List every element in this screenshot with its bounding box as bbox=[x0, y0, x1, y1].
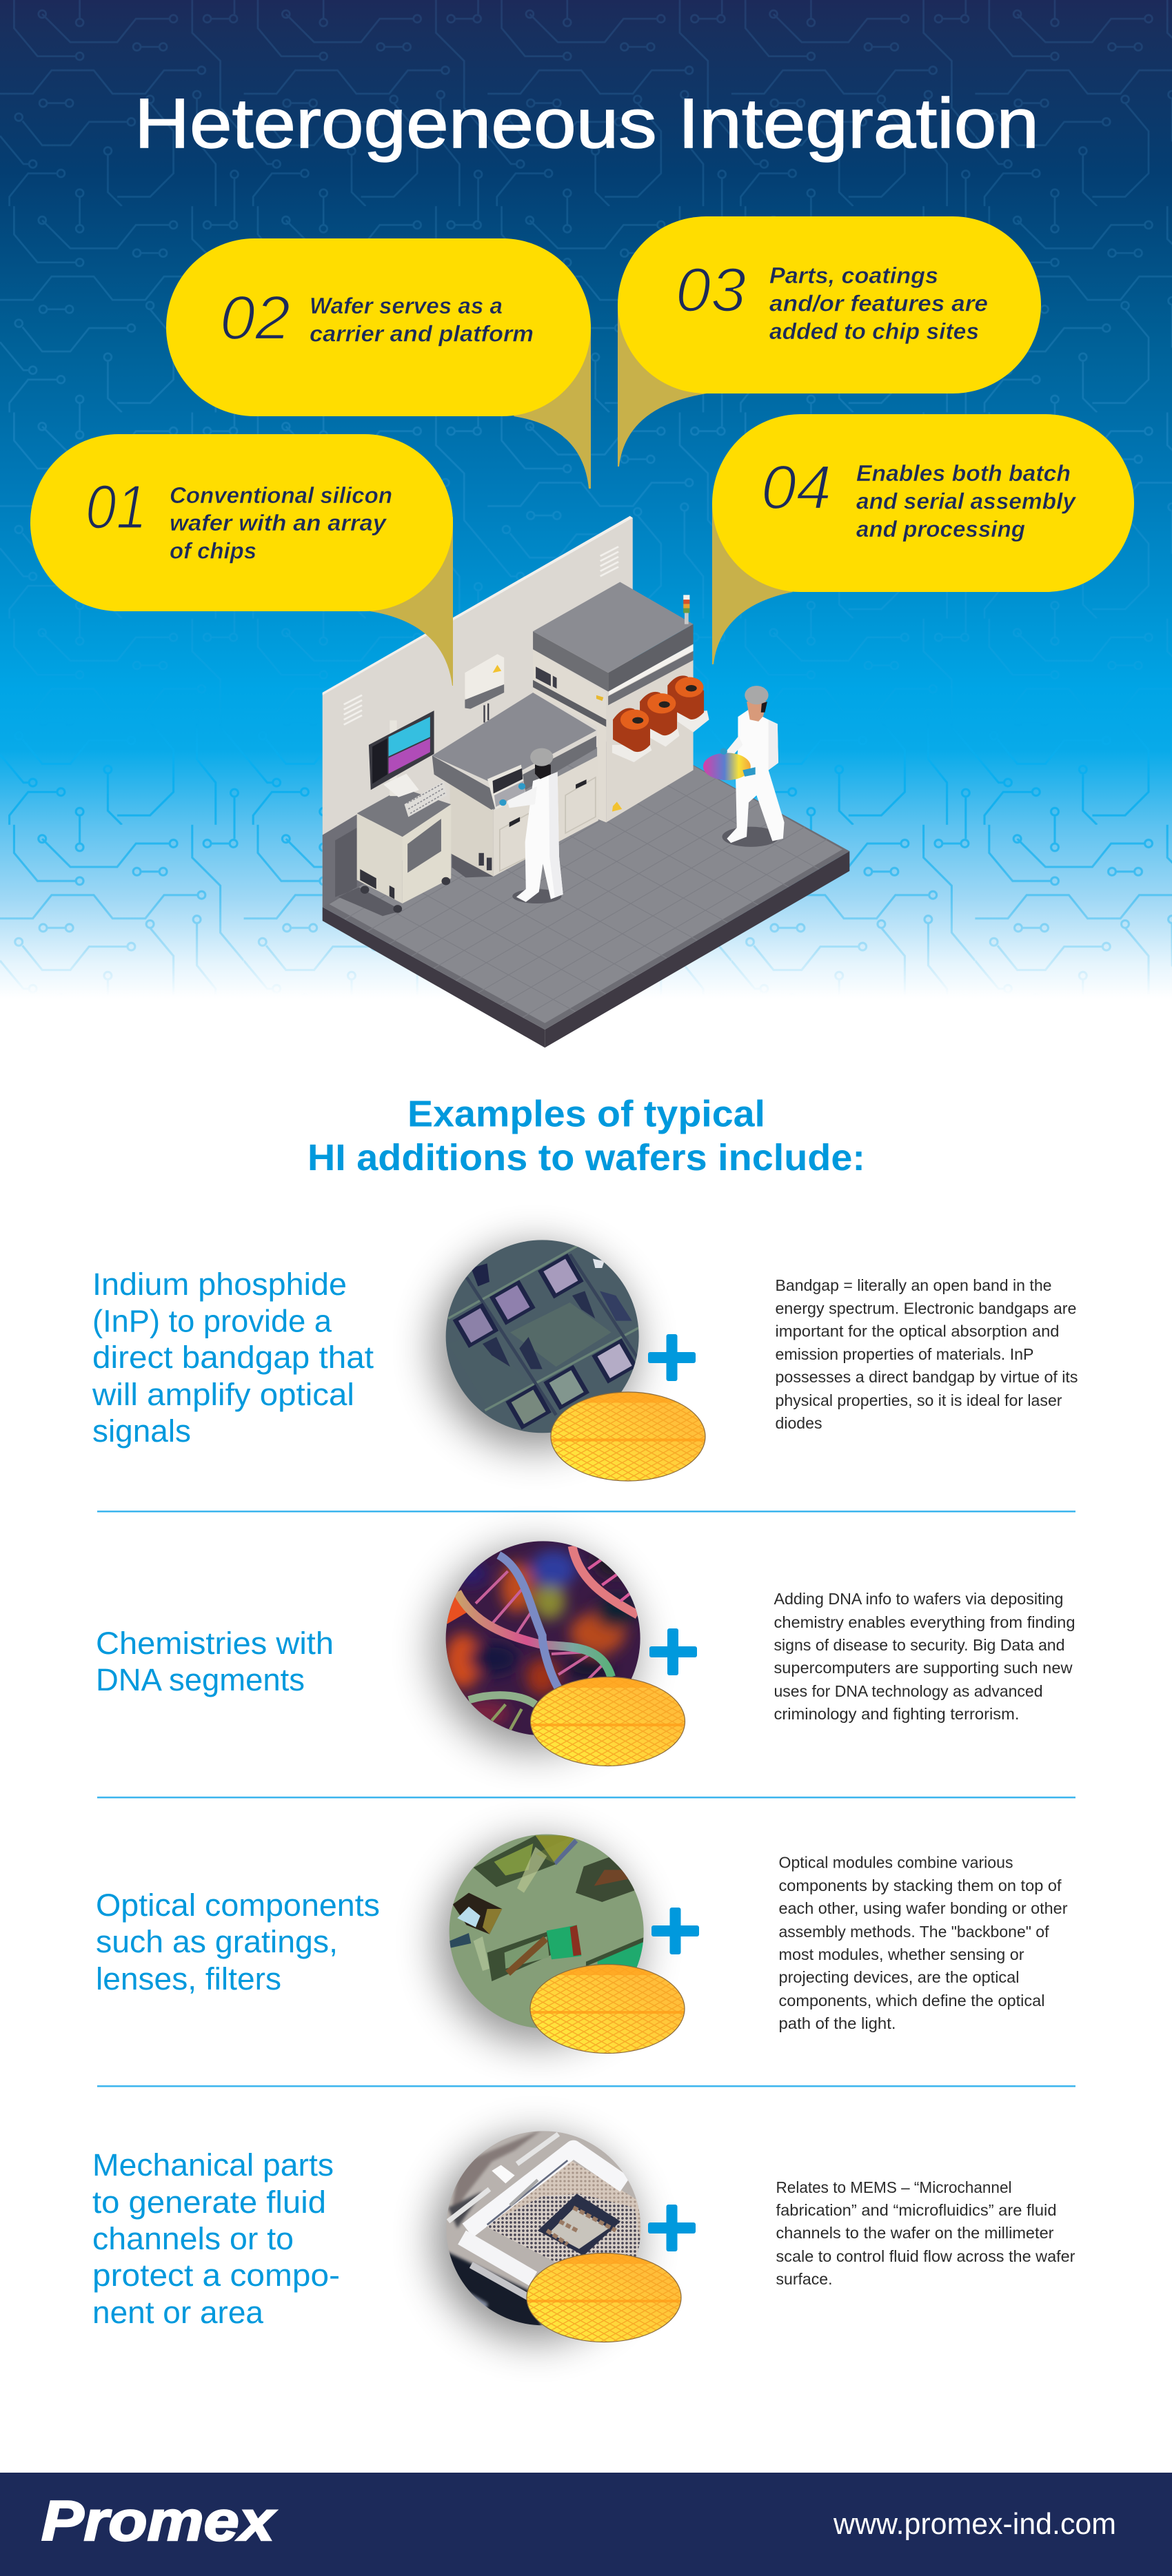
callout 02: Wafer serves as a bbox=[310, 293, 503, 318]
row 2 description bbox=[774, 1590, 1075, 1723]
callout 04: and serial assembly bbox=[856, 488, 1077, 514]
row 1 heading text: Indium phosphide bbox=[92, 1267, 347, 1302]
row 2 description: Adding DNA info to wafers via depositing bbox=[774, 1590, 1063, 1608]
row 2 heading text: DNA segments bbox=[96, 1662, 305, 1697]
shadow bbox=[434, 1247, 636, 1448]
callout 03: 03 bbox=[676, 256, 746, 325]
row 2 description: uses for DNA technology as advanced bbox=[774, 1682, 1042, 1700]
row 1 description: energy spectrum. Electronic bandgaps are bbox=[775, 1299, 1077, 1317]
website url: www.promex-ind.com bbox=[833, 2507, 1116, 2541]
section heading: HI additions to wafers include: bbox=[307, 1137, 865, 1178]
row 2 description: chemistry enables everything from finding bbox=[774, 1613, 1075, 1631]
row 1 description: emission properties of materials. InP bbox=[775, 1345, 1034, 1363]
row 3 description: components by stacking them on top of bbox=[779, 1877, 1062, 1894]
row 2 description: criminology and fighting terrorism. bbox=[774, 1705, 1019, 1723]
footer bar bbox=[0, 2473, 1172, 2576]
callout 03: added to chip sites bbox=[769, 318, 979, 344]
wafer bbox=[551, 1392, 705, 1482]
callout 03: and/or features are bbox=[769, 291, 988, 316]
section heading bbox=[307, 1093, 865, 1178]
row 4 description: channels to the wafer on the millimeter bbox=[776, 2224, 1054, 2242]
row 2 description: signs of disease to security. Big Data and bbox=[774, 1636, 1064, 1654]
photo circle: DNA helix bbox=[443, 1539, 643, 1739]
callout 01: of chips bbox=[170, 538, 256, 564]
row 3 heading text: Optical components bbox=[96, 1888, 380, 1923]
row 4 heading text: to generate fluid bbox=[92, 2185, 326, 2220]
row 3 description: each other, using wafer bonding or other bbox=[779, 1899, 1068, 1917]
row 1 heading text: (InP) to provide a bbox=[92, 1304, 332, 1338]
illustration: isometric cleanroom bbox=[323, 516, 849, 1047]
callout 02: carrier and platform bbox=[310, 321, 534, 346]
row 4 description: surface. bbox=[776, 2270, 833, 2288]
floor slab bbox=[323, 729, 849, 1047]
row 4 heading text: protect a compo- bbox=[92, 2258, 340, 2293]
row 3 description: projecting devices, are the optical bbox=[779, 1968, 1019, 1986]
middle machine bbox=[432, 693, 598, 877]
row 4 description: fabrication” and “microfluidics” are fluid bbox=[776, 2201, 1056, 2219]
stack light bbox=[683, 595, 689, 624]
row 1 heading text: direct bandgap that bbox=[92, 1340, 374, 1375]
orange reels bbox=[612, 675, 709, 762]
row 1 description: possesses a direct bandgap by virtue of its bbox=[775, 1368, 1078, 1386]
row 3 description: most modules, whether sensing or bbox=[779, 1945, 1024, 1963]
photo circle: optical prisms bbox=[446, 1833, 648, 2033]
callout 04 bbox=[712, 414, 1134, 664]
row 3 description: path of the light. bbox=[779, 2014, 896, 2032]
shadow bbox=[438, 1841, 640, 2043]
callout 04: Enables both batch bbox=[856, 460, 1071, 486]
photo circle: chip surface bbox=[443, 1238, 641, 1435]
row 3 heading text: such as gratings, bbox=[96, 1924, 338, 1959]
title: Heterogeneous Integration bbox=[134, 84, 1039, 163]
wall electrical box bbox=[465, 654, 504, 722]
row 4 description: scale to control fluid flow across the wafer bbox=[776, 2247, 1075, 2265]
callout 01 bbox=[30, 434, 453, 686]
shadow bbox=[434, 1548, 636, 1750]
row 3 description: Optical modules combine various bbox=[779, 1854, 1013, 1872]
callout 02: 02 bbox=[220, 284, 290, 353]
wafer bbox=[530, 1964, 685, 2054]
logo: Promex: Promex bbox=[41, 2490, 277, 2553]
row 1: indium phosphide bbox=[92, 1238, 1078, 1482]
row 4 heading text bbox=[92, 2147, 340, 2330]
icon: plus bbox=[651, 1908, 699, 1954]
wafer bbox=[531, 1677, 685, 1766]
row 4 heading text: nent or area bbox=[92, 2295, 264, 2330]
shadow bbox=[434, 2138, 637, 2340]
back wall bbox=[323, 516, 633, 907]
callout 03 bbox=[618, 216, 1041, 467]
row 3 description bbox=[779, 1854, 1068, 2032]
callout 03: Parts, coatings bbox=[769, 263, 938, 288]
row 4 heading text: channels or to bbox=[92, 2221, 294, 2256]
cart with monitor and keyboard bbox=[357, 711, 451, 913]
wafer bbox=[527, 2253, 681, 2342]
callout 01: wafer with an array bbox=[170, 510, 387, 535]
tower machine bbox=[533, 582, 694, 822]
header background with circuit pattern bbox=[0, 0, 1172, 999]
photo circle: processor socket bbox=[443, 2129, 646, 2329]
row 4 heading text: Mechanical parts bbox=[92, 2147, 334, 2183]
technician at control panel bbox=[499, 748, 563, 903]
row 3 description: assembly methods. The "backbone" of bbox=[779, 1923, 1049, 1941]
callout 01: Conventional silicon bbox=[170, 482, 392, 508]
row 2 heading text: Chemistries with bbox=[96, 1626, 334, 1661]
row 2: DNA chemistries bbox=[96, 1539, 1075, 1766]
row 4 description bbox=[776, 2178, 1075, 2288]
row 2 description: supercomputers are supporting such new bbox=[774, 1659, 1073, 1677]
callout 02 bbox=[166, 238, 591, 489]
row 3 description: components, which define the optical bbox=[779, 1992, 1045, 2010]
row 1 description: important for the optical absorption and bbox=[775, 1322, 1059, 1340]
row 3: optical components bbox=[96, 1833, 1068, 2054]
row 2 heading text bbox=[96, 1626, 334, 1697]
row 1 heading text bbox=[92, 1267, 374, 1449]
icon: plus bbox=[649, 1628, 697, 1675]
row 3 heading text bbox=[96, 1888, 380, 1996]
row 1 description: Bandgap = literally an open band in the bbox=[775, 1276, 1052, 1294]
row 1 description: diodes bbox=[775, 1414, 822, 1432]
callout 04: 04 bbox=[761, 453, 831, 522]
technician holding wafer bbox=[703, 686, 785, 847]
row 1 description bbox=[775, 1276, 1078, 1432]
row 1 description: physical properties, so it is ideal for laser bbox=[775, 1391, 1062, 1409]
icon: plus bbox=[648, 2205, 696, 2251]
callout 01: 01 bbox=[85, 473, 147, 542]
section heading: Examples of typical bbox=[407, 1093, 765, 1134]
row 1 heading text: signals bbox=[92, 1413, 191, 1449]
icon: plus bbox=[648, 1334, 696, 1381]
row 4: mechanical parts bbox=[92, 2129, 1075, 2342]
row 3 heading text: lenses, filters bbox=[96, 1961, 281, 1996]
callout 04: and processing bbox=[856, 516, 1025, 542]
row 1 heading text: will amplify optical bbox=[92, 1377, 354, 1412]
row 4 description: Relates to MEMS – “Microchannel bbox=[776, 2178, 1012, 2196]
